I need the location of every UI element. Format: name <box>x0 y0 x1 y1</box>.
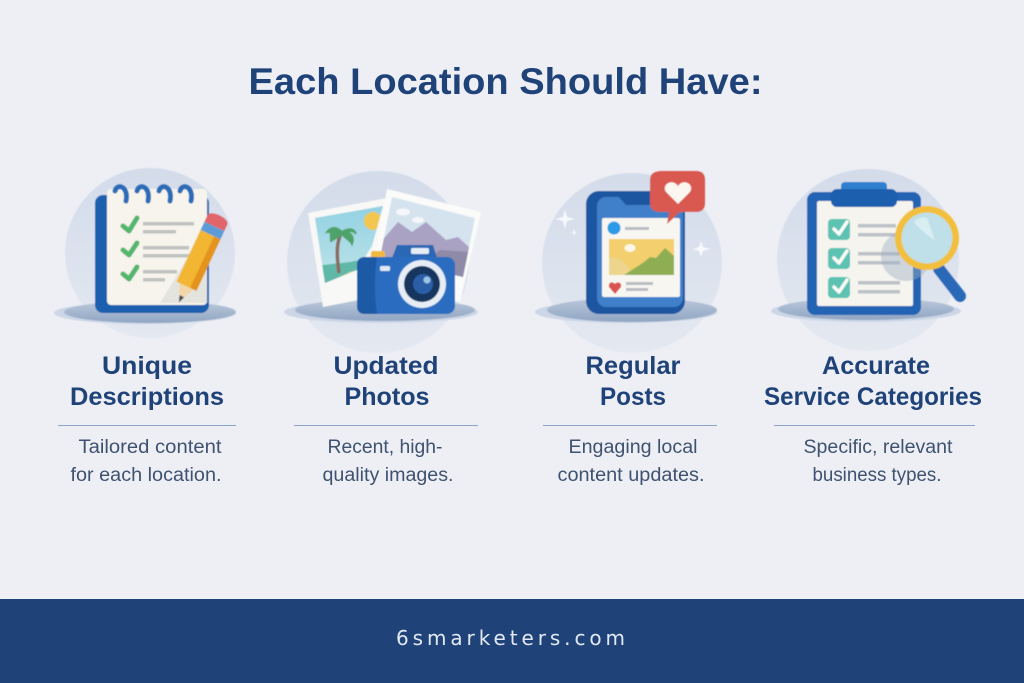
description: Specific, relevant <box>804 437 953 458</box>
footer band <box>0 599 1024 683</box>
panel: updated photos <box>284 171 481 486</box>
title: Each Location Should Have: <box>248 61 762 102</box>
heading: Accurate <box>822 352 930 380</box>
description: Recent, high- <box>328 437 442 458</box>
icon: phone with post <box>535 171 722 353</box>
panel: regular posts: Posts <box>600 383 666 411</box>
camera <box>371 251 385 259</box>
panel: updated photos: Photos <box>344 383 430 411</box>
panel: unique descriptions <box>54 168 236 486</box>
photo: beach <box>308 197 410 307</box>
icon: notepad and pencil <box>54 168 236 338</box>
description: Tailored content <box>78 437 222 458</box>
heading: Unique <box>102 352 192 380</box>
heading: Regular <box>586 352 681 380</box>
icon: clipboard and magnifier <box>771 169 961 351</box>
panel: unique descriptions: for each location. <box>70 465 222 486</box>
panel: accurate service categories <box>764 169 982 486</box>
footer url: 6smarketers.com <box>396 626 625 650</box>
panel: regular posts: content updates. <box>558 465 704 486</box>
panel: unique descriptions: Descriptions <box>70 383 224 411</box>
photo: mountains <box>371 189 481 302</box>
pencil <box>169 211 230 307</box>
panel: updated photos: quality images. <box>322 465 454 486</box>
icon: photos and camera <box>284 171 481 353</box>
panel: regular posts <box>535 171 722 486</box>
description: Engaging local <box>568 437 698 458</box>
panel: accurate service categories: Service Categories <box>764 383 982 411</box>
heading: Updated <box>334 352 438 380</box>
panel: accurate service categories: business types. <box>812 465 942 486</box>
